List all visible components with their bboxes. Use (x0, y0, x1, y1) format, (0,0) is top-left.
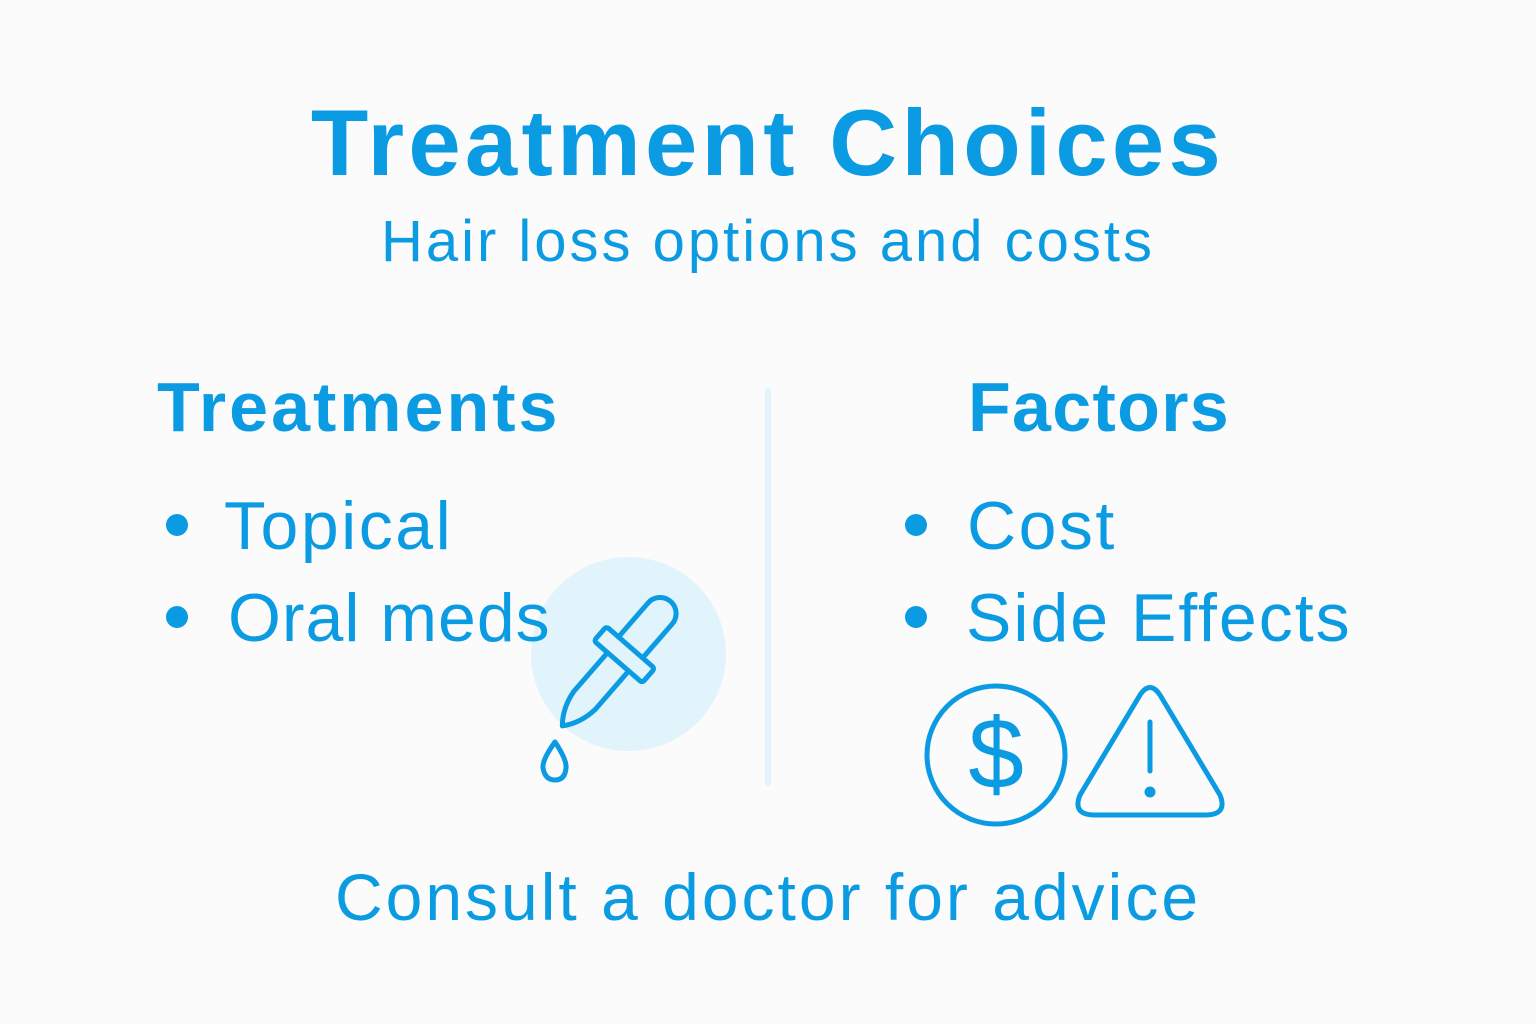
list: factors (905, 488, 1352, 656)
icon: dropper (538, 580, 695, 747)
divider (765, 388, 771, 786)
item: side effects (905, 580, 1352, 656)
item: oral meds (166, 580, 551, 656)
icon: warning triangle (1078, 688, 1222, 815)
icon: dollar coin: $ (968, 698, 1024, 810)
heading: factors: Factors (968, 368, 1230, 446)
text: Topical (224, 488, 453, 564)
item: cost (905, 488, 1117, 564)
list: treatments (166, 488, 551, 656)
title: Treatment Choices (311, 90, 1225, 195)
footer note: Consult a doctor for advice (335, 860, 1201, 934)
icon: dropper background circle (531, 557, 726, 751)
icon: drop (543, 742, 566, 780)
text: Oral meds (228, 580, 551, 656)
text: Cost (967, 488, 1117, 564)
item: topical (166, 488, 453, 564)
subtitle: Hair loss options and costs (381, 209, 1155, 274)
icon: dollar coin (927, 686, 1065, 824)
heading: treatments: Treatments (157, 368, 560, 446)
text: Side Effects (966, 580, 1352, 656)
